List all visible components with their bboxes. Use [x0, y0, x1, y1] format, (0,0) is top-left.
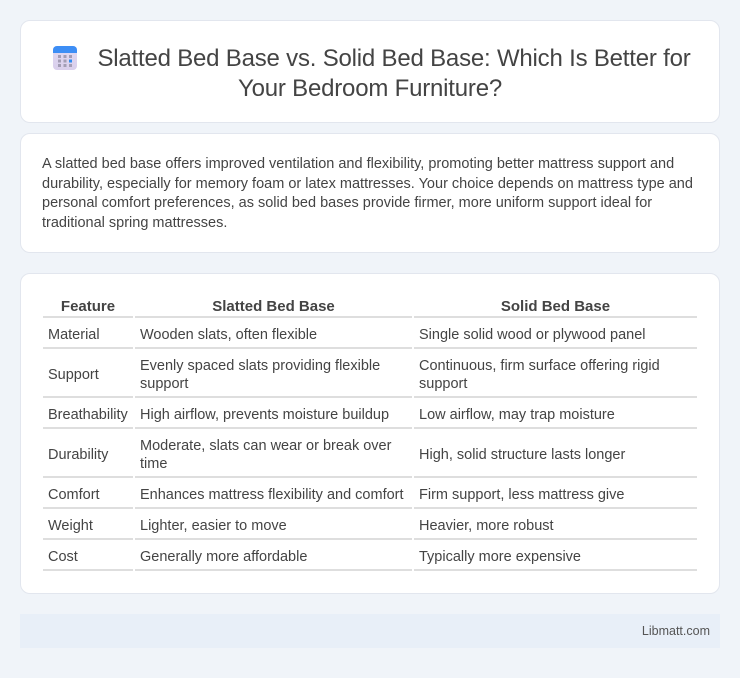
footer brand: Libmatt.com: [642, 624, 710, 638]
table rows: Enhances mattress flexibility and comfort: [140, 487, 404, 503]
table rows: Material: [48, 327, 100, 343]
table rows: Cost: [48, 549, 78, 565]
table header: Solid Bed Base: [501, 298, 610, 315]
intro paragraph: personal comfort preferences, as solid bed bases provide firmer, more uniform support ideal for: [42, 195, 652, 211]
table rows: Evenly spaced slats providing flexible: [140, 358, 380, 374]
table rows: Support: [48, 367, 99, 383]
title: Slatted Bed Base vs. Solid Bed Base: Which Is Better for: [97, 45, 691, 72]
table header: Feature: [61, 298, 115, 315]
comparison table panel: [20, 273, 720, 594]
table header: [61, 298, 610, 315]
table rows: Moderate, slats can wear or break over: [140, 438, 391, 454]
table rows: Generally more affordable: [140, 549, 307, 565]
title card: [20, 20, 720, 123]
table rows: support: [419, 376, 467, 392]
table rows: Heavier, more robust: [419, 518, 554, 534]
intro paragraph: durability, especially for memory foam or latex mattresses. Your choice depends on mattress type and: [42, 176, 693, 192]
table rows: Durability: [48, 447, 108, 463]
table rows: Comfort: [48, 487, 100, 503]
table rows: Weight: [48, 518, 93, 534]
icon: calendar: [53, 46, 77, 70]
table rows: High airflow, prevents moisture buildup: [140, 407, 389, 423]
table rows: [43, 316, 697, 571]
table rows: Breathability: [48, 407, 128, 423]
table rows: Wooden slats, often flexible: [140, 327, 317, 343]
intro paragraph: A slatted bed base offers improved ventilation and flexibility, promoting better mattress support and: [42, 156, 674, 172]
table rows: Firm support, less mattress give: [419, 487, 624, 503]
table rows: Lighter, easier to move: [140, 518, 287, 534]
table rows: Continuous, firm surface offering rigid: [419, 358, 660, 374]
table rows: Low airflow, may trap moisture: [419, 407, 615, 423]
table rows: time: [140, 456, 167, 472]
intro paragraph: [42, 156, 693, 230]
table rows: support: [140, 376, 188, 392]
title: Your Bedroom Furniture?: [238, 75, 502, 102]
table rows: High, solid structure lasts longer: [419, 447, 625, 463]
intro paragraph: traditional spring mattresses.: [42, 214, 227, 230]
table rows: Typically more expensive: [419, 549, 581, 565]
footer bar: [20, 614, 720, 648]
title: [97, 45, 691, 102]
intro text panel: [20, 133, 720, 253]
table header: Slatted Bed Base: [212, 298, 335, 315]
table rows: Single solid wood or plywood panel: [419, 327, 646, 343]
